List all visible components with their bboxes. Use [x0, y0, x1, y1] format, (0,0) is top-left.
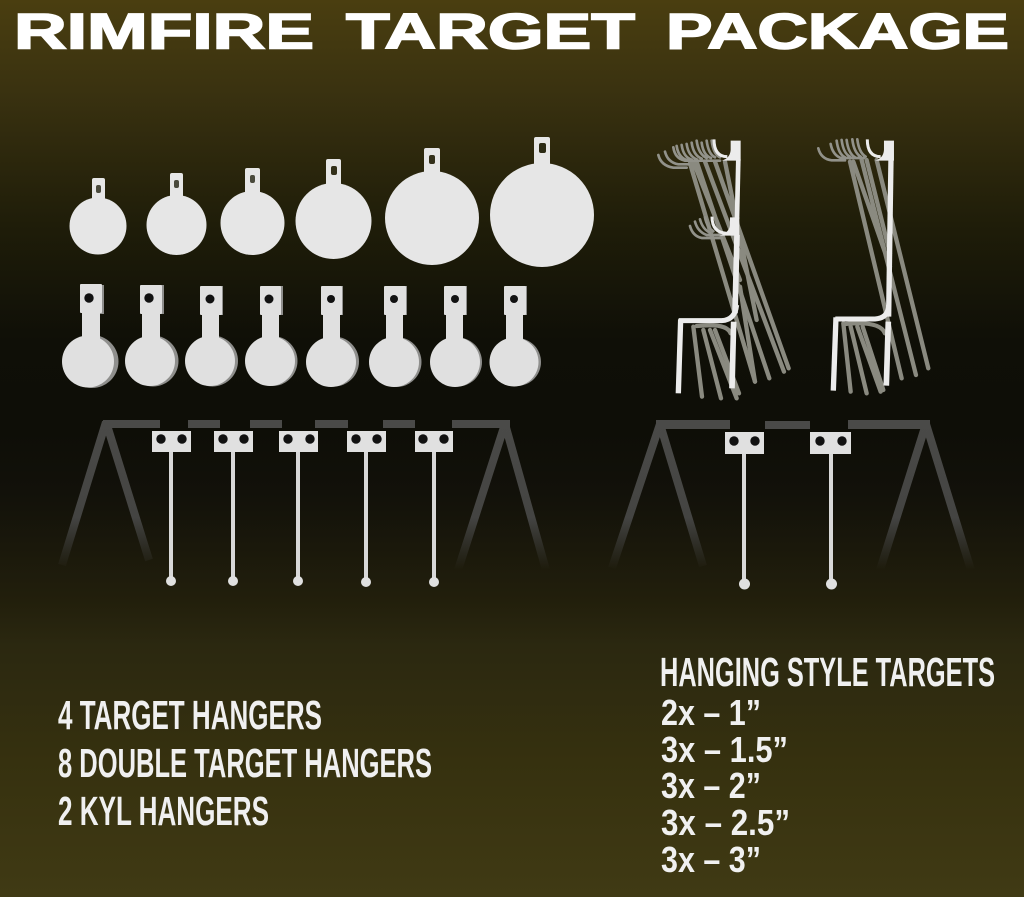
text block: hanger counts: 4 TARGET HANGERS: [58, 692, 322, 738]
title: RIMFIRE: [14, 4, 314, 60]
stacked hangers: right stack: [818, 139, 928, 393]
text block: hanging style targets: [660, 649, 995, 880]
stacked hangers: left stack: [658, 139, 789, 398]
text block: hanging style targets: 3x – 2”: [661, 765, 761, 806]
text block: hanging style targets: 3x – 2.5”: [661, 802, 790, 843]
text block: hanging style targets: 2x – 1”: [661, 692, 761, 733]
text block: hanging style targets: 3x – 1.5”: [661, 729, 788, 770]
paddle targets row: [62, 284, 541, 388]
left target hangers: [152, 431, 453, 587]
text block: hanger counts: [58, 692, 432, 834]
text block: hanger counts: 2 KYL HANGERS: [58, 788, 269, 834]
left frame: [62, 420, 546, 570]
title: [14, 4, 1009, 60]
title: TARGET: [346, 4, 635, 60]
right target hangers: [725, 432, 851, 590]
right frame: [612, 420, 971, 570]
hanging round targets row: [70, 137, 594, 267]
text block: hanger counts: 8 DOUBLE TARGET HANGERS: [58, 740, 432, 786]
title: PACKAGE: [666, 4, 1009, 60]
text block: hanging style targets: 3x – 3”: [661, 839, 761, 880]
